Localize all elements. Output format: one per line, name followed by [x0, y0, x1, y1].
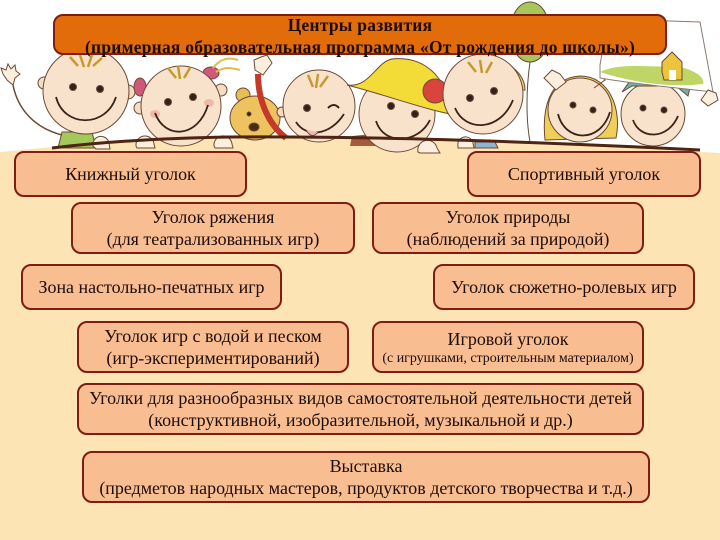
panel: play corner: (с игрушками, строительным материалом): [382, 350, 634, 366]
bear toy: [230, 55, 286, 140]
panel: dress-up corner: Уголок ряжения: [152, 207, 274, 227]
background: cream ground: [0, 137, 720, 540]
panel: water and sand corner: [77, 321, 349, 373]
panel: independent activity corners: [77, 383, 644, 435]
panel: book corner: Книжный уголок: [65, 164, 196, 184]
kid 3: [277, 70, 355, 142]
panel: book corner: [14, 151, 247, 197]
panel: independent activity corners: Уголки для разнообразных видов самостоятельной деятельности детей: [89, 388, 632, 408]
kid 5 with balloon: [443, 2, 550, 148]
panel: sports corner: Спортивный уголок: [508, 164, 660, 184]
panel: exhibition: (предметов народных мастеров, продуктов детского творчества и т.д.): [99, 478, 633, 498]
kid 2: [134, 58, 240, 148]
kid 6 girl with yellow hair: [544, 70, 618, 142]
panel: dress-up corner: [71, 202, 355, 254]
title banner: Центры развития: [288, 15, 432, 35]
panel: water and sand corner: Уголок игр с водой и песком: [104, 326, 322, 346]
panel: exhibition: [82, 451, 650, 503]
panel: independent activity corners: (конструктивной, изобразительной, музыкальной и др.): [148, 410, 573, 430]
panel: water and sand corner: (игр-экспериментирований): [106, 348, 320, 368]
panel: play corner: Игровой уголок: [448, 328, 568, 348]
panel: nature corner: Уголок природы: [446, 207, 570, 227]
panel: nature corner: (наблюдений за природой): [407, 229, 609, 249]
kid 7 with drawing sheet: [600, 19, 718, 146]
panel: sports corner: [467, 151, 701, 197]
panel: nature corner: [372, 202, 644, 254]
title banner: [53, 14, 667, 55]
panel: board games zone: [21, 264, 282, 310]
title banner: (примерная образовательная программа «От рождения до школы»): [85, 37, 635, 57]
kid 1: [1, 48, 135, 149]
panel: role-play corner: [433, 264, 695, 310]
panel: dress-up corner: (для театрализованных игр): [107, 229, 319, 249]
panel: board games zone: Зона настольно-печатных игр: [38, 277, 265, 297]
fence rail: [52, 137, 700, 150]
panel: play corner: [372, 321, 644, 373]
kid 4 with yellow hat: [347, 59, 467, 153]
panel: exhibition: Выставка: [330, 456, 402, 476]
panel: role-play corner: Уголок сюжетно-ролевых игр: [451, 277, 677, 297]
